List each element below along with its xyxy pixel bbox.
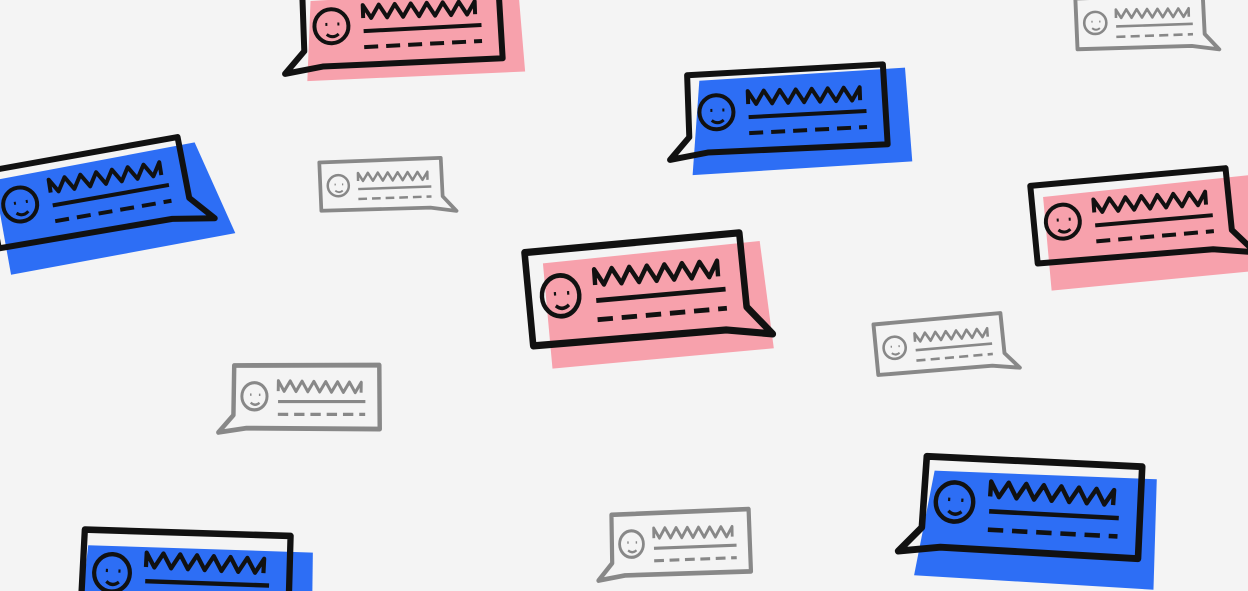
bubble: gray right middle [873, 312, 1020, 378]
bubble: gray small left [319, 158, 457, 213]
bubble: blue bottom left [58, 524, 318, 591]
bubble: blue bottom right [897, 450, 1162, 591]
bubble: gray bottom [597, 509, 751, 581]
bubble: blue top right [667, 63, 912, 176]
bubble: blue left [0, 130, 236, 276]
bubble: gray top right [1075, 0, 1219, 52]
bubble: gray left middle [218, 362, 381, 435]
bubble: pink center [524, 231, 774, 370]
bubble: pink right [1030, 165, 1248, 292]
bubble: pink top [282, 0, 525, 82]
